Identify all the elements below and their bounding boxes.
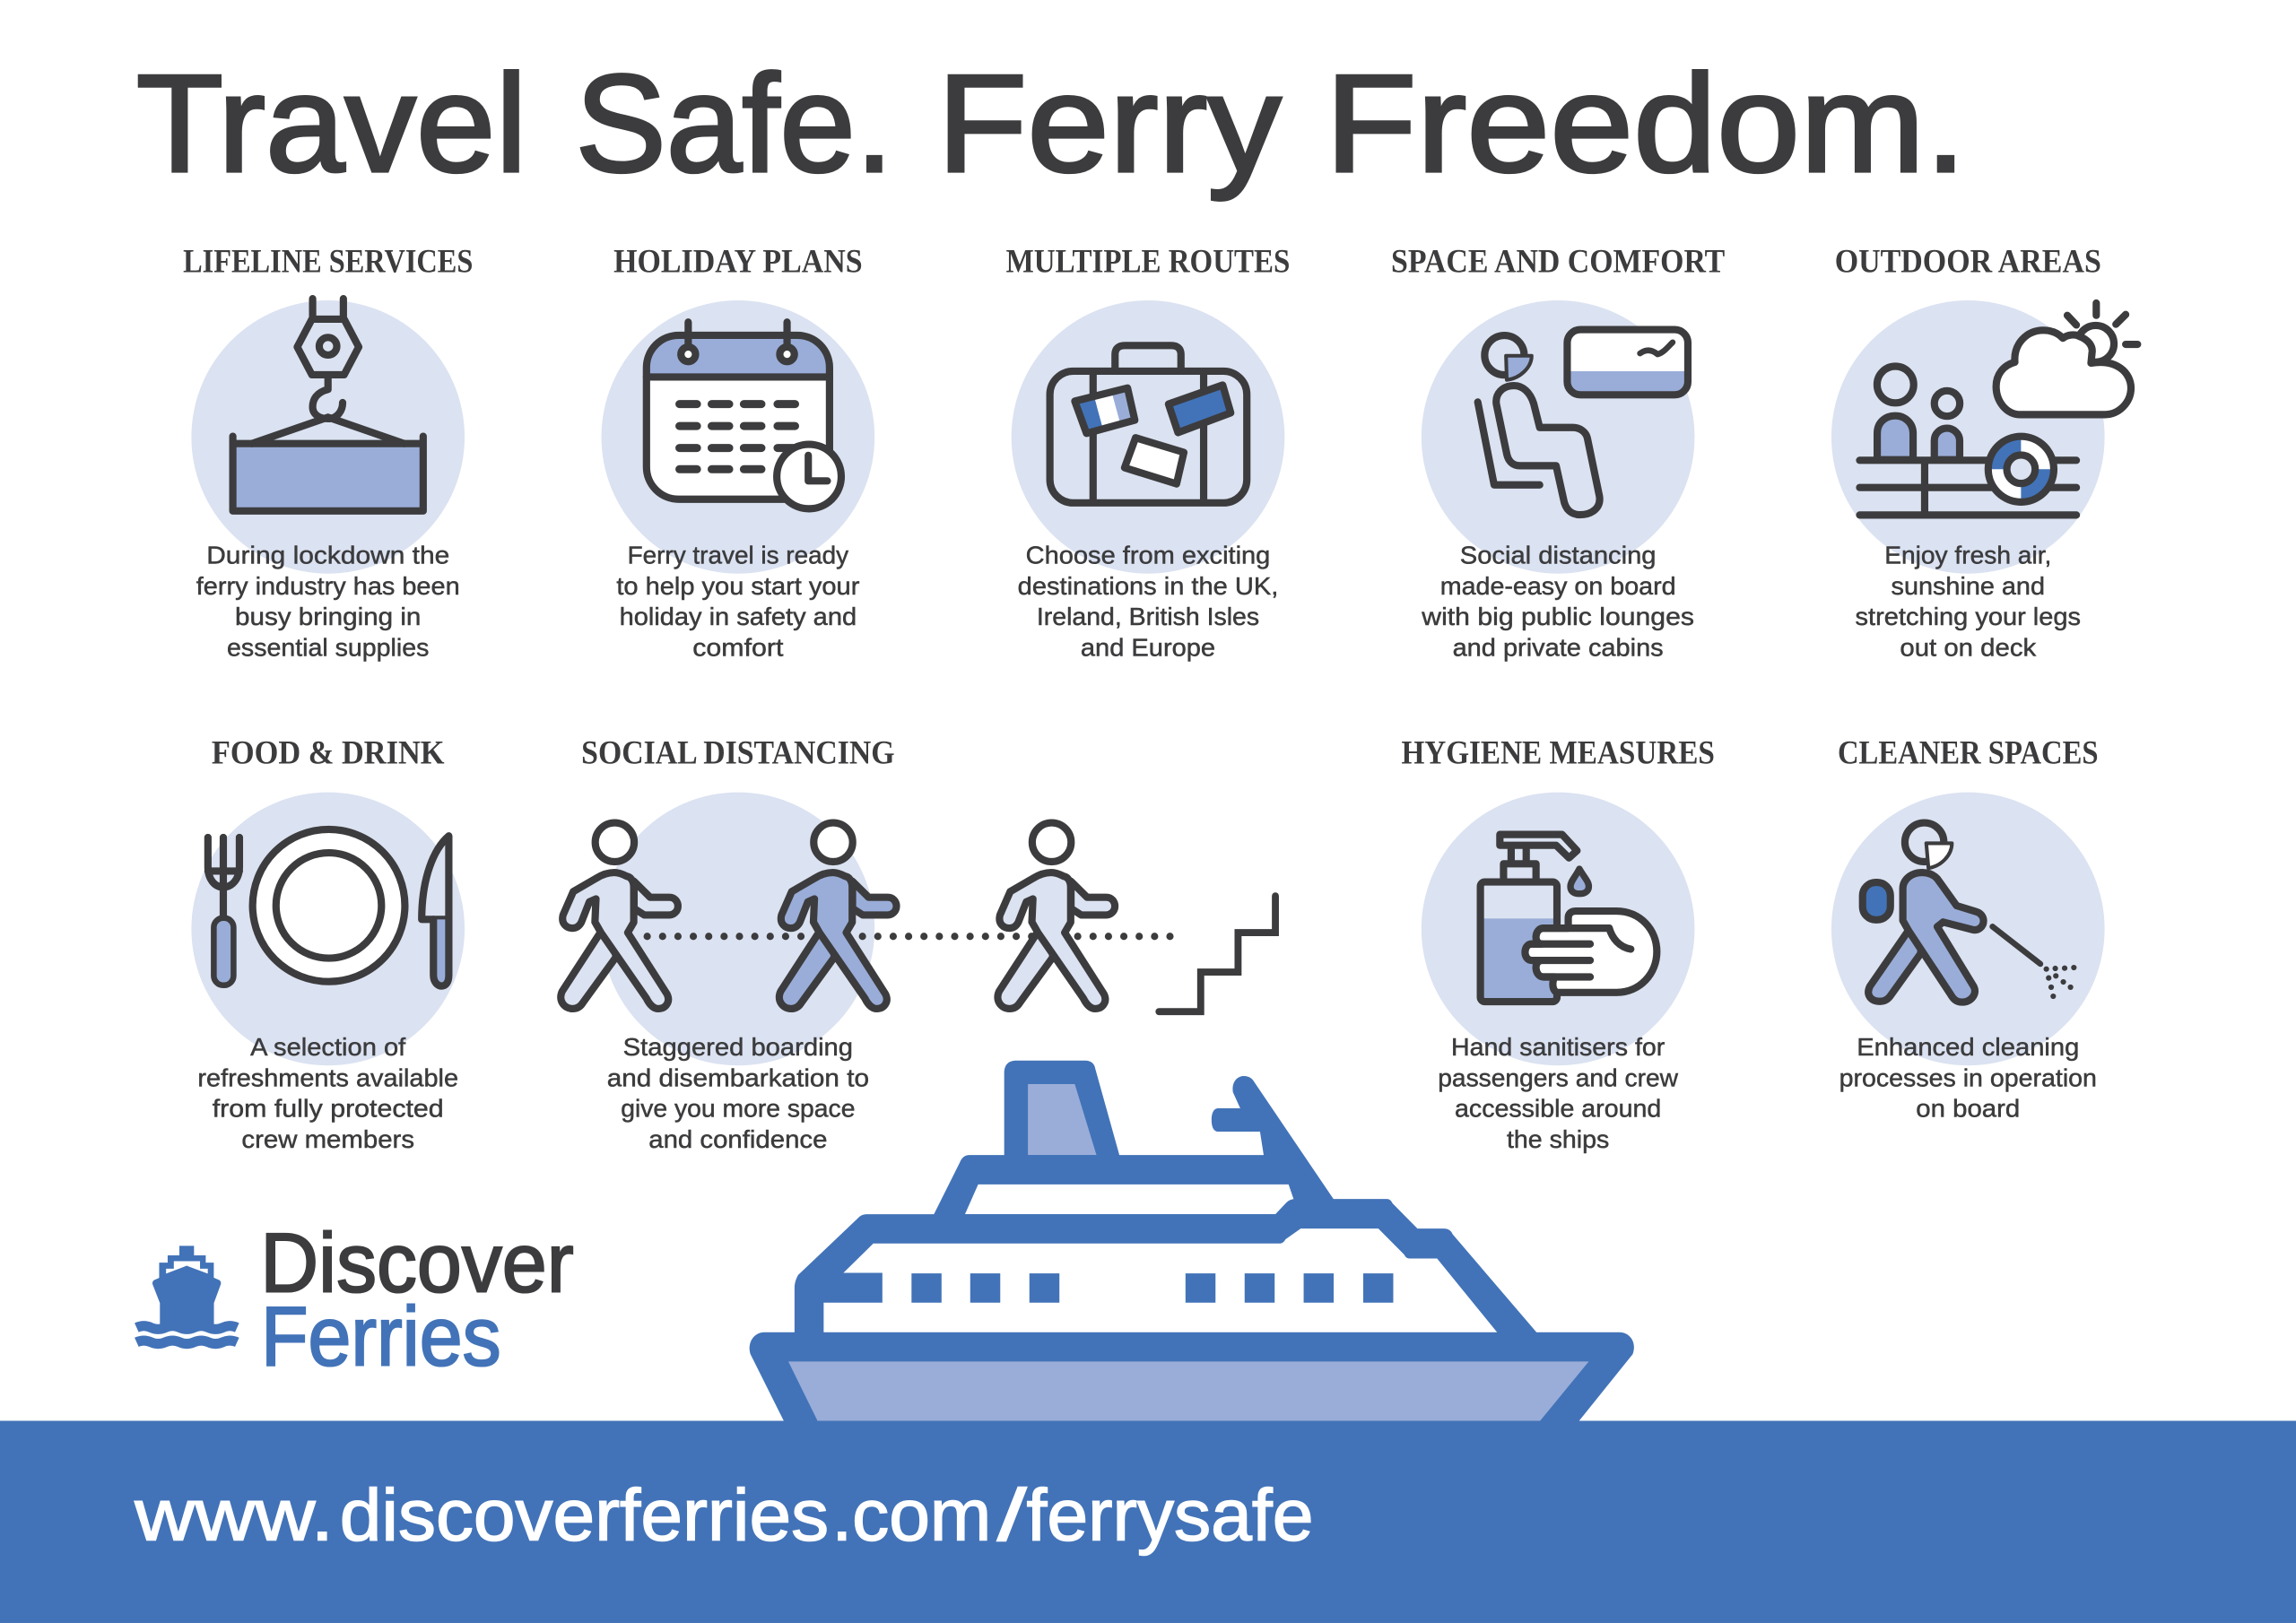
title: Ferry — [937, 46, 1282, 201]
panel: space and comfort — [1391, 243, 1725, 661]
body text: multiple routes — [1018, 542, 1278, 661]
icon: crane hook and container — [233, 299, 423, 511]
body text: space and comfort: and private cabins — [1453, 633, 1664, 661]
body text: cleaner spaces: on board — [1916, 1095, 2020, 1123]
footer url: discoverferries — [340, 1475, 829, 1557]
panel: cleaner spaces — [1831, 733, 2105, 1123]
body text: space and comfort: Social distancing — [1460, 542, 1657, 569]
body text: social distancing: and disembarkation to — [607, 1063, 869, 1091]
ferry funnel — [1004, 1061, 1120, 1159]
body text: social distancing — [607, 1033, 869, 1153]
body text: multiple routes: Ireland, British Isles — [1037, 603, 1259, 630]
panel: multiple routes — [1006, 243, 1290, 661]
body text: cleaner spaces — [1839, 1033, 2097, 1123]
icon: cleaner with spray backpack — [1863, 823, 2076, 1002]
panel: social distancing — [561, 733, 1275, 1153]
icon: stairs — [1159, 896, 1275, 1011]
body text: lifeline services: During lockdown the — [206, 542, 449, 569]
footer url: ferrysafe — [1026, 1475, 1313, 1557]
body text: outdoor areas: stretching your legs — [1856, 603, 2081, 630]
body text: space and comfort: with big public lounges — [1421, 603, 1694, 630]
body text: hygiene measures: the ships — [1507, 1125, 1609, 1153]
footer url: www. — [134, 1475, 334, 1557]
body text: holiday plans — [616, 542, 859, 661]
panel: lifeline services — [183, 243, 473, 661]
body text: food and drink: crew members — [241, 1125, 414, 1153]
body text: multiple routes: and Europe — [1081, 633, 1215, 661]
panel: outdoor areas — [1831, 243, 2137, 661]
body text: lifeline services — [196, 542, 460, 661]
body text: holiday plans: comfort — [692, 633, 784, 661]
body text: holiday plans: Ferry travel is ready — [628, 542, 848, 569]
body text: space and comfort — [1421, 542, 1694, 661]
icon: seated passenger at window — [1478, 330, 1688, 515]
heading: space and comfort: SPACE AND COMFORT — [1391, 243, 1725, 280]
footer band — [0, 1421, 2296, 1623]
body text: hygiene measures — [1438, 1033, 1679, 1153]
title: Travel — [136, 46, 527, 201]
title: Safe. — [576, 46, 893, 201]
spray droplets — [2044, 965, 2076, 999]
wordmark: Discover: Discover — [260, 1216, 574, 1310]
body text: outdoor areas: out on deck — [1900, 633, 2036, 661]
body text: lifeline services: busy bringing in — [235, 603, 421, 630]
heading: cleaner spaces: CLEANER SPACES — [1838, 733, 2099, 770]
icon: family on deck with lifebuoy and sun — [1859, 303, 2137, 515]
wordmark: Ferries: Ferries — [261, 1289, 501, 1384]
ferry main deck — [795, 1199, 1539, 1335]
body text: food and drink: A selection of — [250, 1033, 406, 1061]
body text: cleaner spaces: Enhanced cleaning — [1857, 1033, 2079, 1061]
logo: Discover Ferries — [136, 1216, 574, 1384]
body text: food and drink: refreshments available — [197, 1063, 458, 1091]
body text: social distancing: Staggered boarding — [623, 1033, 853, 1061]
body text: space and comfort: made-easy on board — [1440, 572, 1676, 600]
ferry upper deck — [933, 1155, 1333, 1217]
panel: hygiene measures — [1401, 733, 1715, 1153]
icon: calendar with clock — [647, 322, 841, 508]
body text: hygiene measures: accessible around — [1455, 1095, 1661, 1123]
body text: food and drink: from fully protected — [213, 1095, 444, 1123]
icon: walking figure two, highlighted — [779, 823, 897, 1009]
body text: food and drink — [197, 1033, 458, 1153]
heading: social distancing: SOCIAL DISTANCING — [581, 733, 895, 770]
body text: multiple routes: Choose from exciting — [1026, 542, 1270, 569]
title: Freedom. — [1326, 46, 1967, 201]
body text: lifeline services: essential supplies — [227, 633, 429, 661]
body text: holiday plans: to help you start your — [616, 572, 859, 600]
icon: walking figure one — [561, 823, 678, 1009]
body text: outdoor areas — [1856, 542, 2081, 661]
icon: walking figure three — [997, 823, 1115, 1009]
body text: social distancing: give you more space — [621, 1095, 855, 1123]
body text: hygiene measures: Hand sanitisers for — [1451, 1033, 1665, 1061]
heading: multiple routes: MULTIPLE ROUTES — [1006, 243, 1290, 280]
body text: hygiene measures: passengers and crew — [1438, 1063, 1679, 1091]
panel: holiday plans — [602, 243, 874, 661]
body text: multiple routes: destinations in the UK, — [1018, 572, 1278, 600]
body text: holiday plans: holiday in safety and — [620, 603, 857, 630]
heading: outdoor areas: OUTDOOR AREAS — [1835, 243, 2101, 280]
footer url: / — [997, 1475, 1027, 1557]
icon: logo ship and waves — [136, 1245, 237, 1344]
icon: suitcase with stickers — [1050, 345, 1247, 503]
dotted distancing line — [648, 934, 1178, 939]
heading: lifeline services: LIFELINE SERVICES — [183, 243, 473, 280]
heading: hygiene measures: HYGIENE MEASURES — [1401, 733, 1715, 770]
ferry hull — [750, 1332, 1634, 1421]
panel: food and drink — [191, 733, 465, 1153]
heading: holiday plans: HOLIDAY PLANS — [613, 243, 863, 280]
ferry mast — [1212, 1076, 1335, 1202]
heading: food and drink: FOOD & DRINK — [212, 733, 445, 770]
body text: outdoor areas: Enjoy fresh air, — [1884, 542, 2051, 569]
footer url: .com — [831, 1475, 991, 1557]
body text: lifeline services: ferry industry has been — [196, 572, 460, 600]
body text: social distancing: and confidence — [648, 1125, 827, 1153]
body text: outdoor areas: sunshine and — [1892, 572, 2045, 600]
icon: sanitiser bottle and hand — [1481, 835, 1657, 1002]
icon: plate, fork and knife — [208, 829, 448, 986]
illustration: ferry — [750, 1061, 1634, 1421]
body text: cleaner spaces: processes in operation — [1839, 1063, 2097, 1091]
